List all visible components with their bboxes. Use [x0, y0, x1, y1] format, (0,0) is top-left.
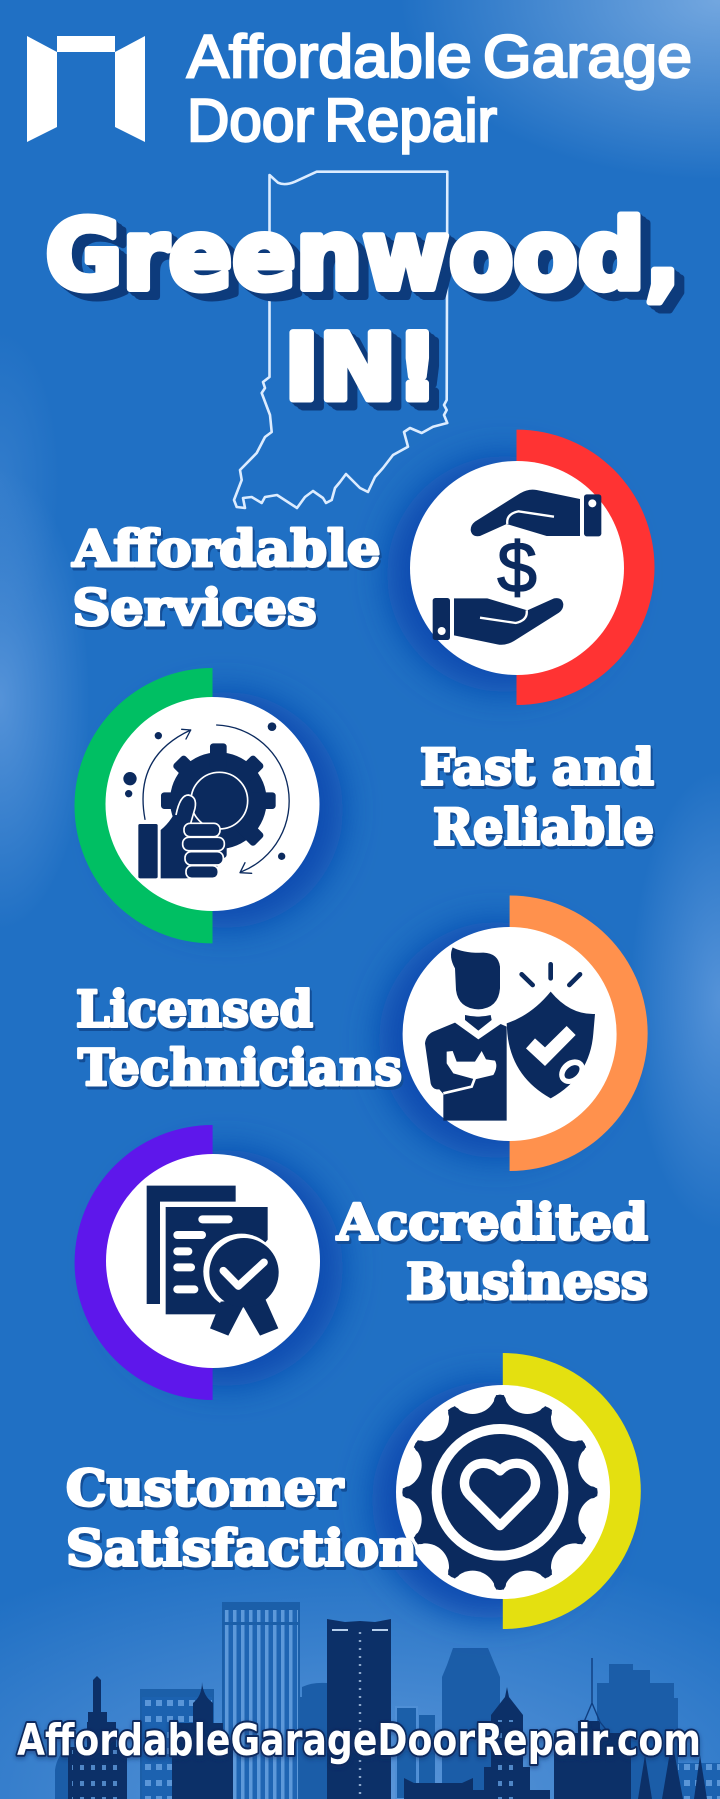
label: licensed technicians — [76, 980, 402, 1097]
label: fast and reliable: Reliable — [433, 798, 654, 856]
panel: customer satisfaction icon — [372, 1353, 641, 1629]
shield — [507, 992, 595, 1098]
low dark building — [404, 1778, 473, 1799]
domed building — [172, 1682, 233, 1799]
church spires — [638, 1740, 707, 1799]
light towers — [396, 1707, 435, 1799]
city skyline — [55, 1602, 720, 1799]
icon: thumbs up gear — [123, 722, 289, 878]
dollar sign: $ — [497, 528, 537, 608]
label: affordable services: Affordable — [71, 519, 380, 578]
company name — [187, 23, 692, 154]
label: licensed technicians: Licensed — [76, 980, 313, 1038]
main title: IN! — [284, 316, 438, 421]
label: customer satisfaction: Satisfaction — [66, 1518, 417, 1578]
main title: Greenwood, — [46, 200, 680, 312]
gear body — [402, 1394, 598, 1590]
heart — [464, 1463, 536, 1526]
pointed building — [473, 1687, 550, 1799]
label: affordable services — [71, 519, 380, 637]
mast building — [554, 1658, 631, 1799]
tower with vertical stripes — [222, 1602, 300, 1799]
label: accredited business: Accredited — [336, 1192, 648, 1252]
label: customer satisfaction: Customer — [66, 1458, 344, 1518]
icon: hands and dollar — [433, 490, 601, 645]
panel: licensed technicians icon — [379, 896, 648, 1171]
dark tall tower — [327, 1619, 391, 1799]
right windowed block — [678, 1763, 720, 1799]
documents — [147, 1186, 269, 1315]
company name: Affordable Garage — [187, 23, 692, 90]
label: accredited business: Business — [406, 1252, 648, 1311]
bottom hand — [433, 598, 563, 645]
label: affordable services: Services — [72, 578, 316, 637]
panel: affordable services icon — [387, 430, 655, 705]
rays — [522, 964, 580, 985]
thumb hand — [138, 795, 224, 878]
main title — [46, 200, 680, 421]
state outline: Indiana — [234, 172, 447, 508]
icon: technician and shield — [425, 947, 595, 1121]
icon: garage door logo — [27, 36, 145, 142]
back buildings — [55, 1648, 678, 1799]
label: fast and reliable — [420, 738, 654, 856]
label: customer satisfaction — [66, 1458, 417, 1578]
label: fast and reliable: Fast and — [420, 738, 654, 796]
panel: fast and reliable icon — [74, 668, 343, 943]
circular arrows — [143, 725, 289, 873]
technician — [425, 947, 507, 1121]
label: licensed technicians: Technicians — [78, 1038, 402, 1097]
icon: gear with heart — [402, 1394, 598, 1590]
dots — [123, 722, 285, 860]
label: accredited business — [336, 1192, 648, 1311]
panel: accredited business icon — [75, 1125, 343, 1400]
windowed mid-rise — [140, 1689, 214, 1799]
logo and company name — [27, 23, 692, 154]
icon: certificate — [147, 1186, 279, 1336]
top hand — [471, 490, 601, 536]
gear — [161, 743, 276, 858]
badge — [203, 1234, 279, 1336]
clock tower — [68, 1676, 127, 1799]
company name: Door Repair — [187, 87, 497, 154]
